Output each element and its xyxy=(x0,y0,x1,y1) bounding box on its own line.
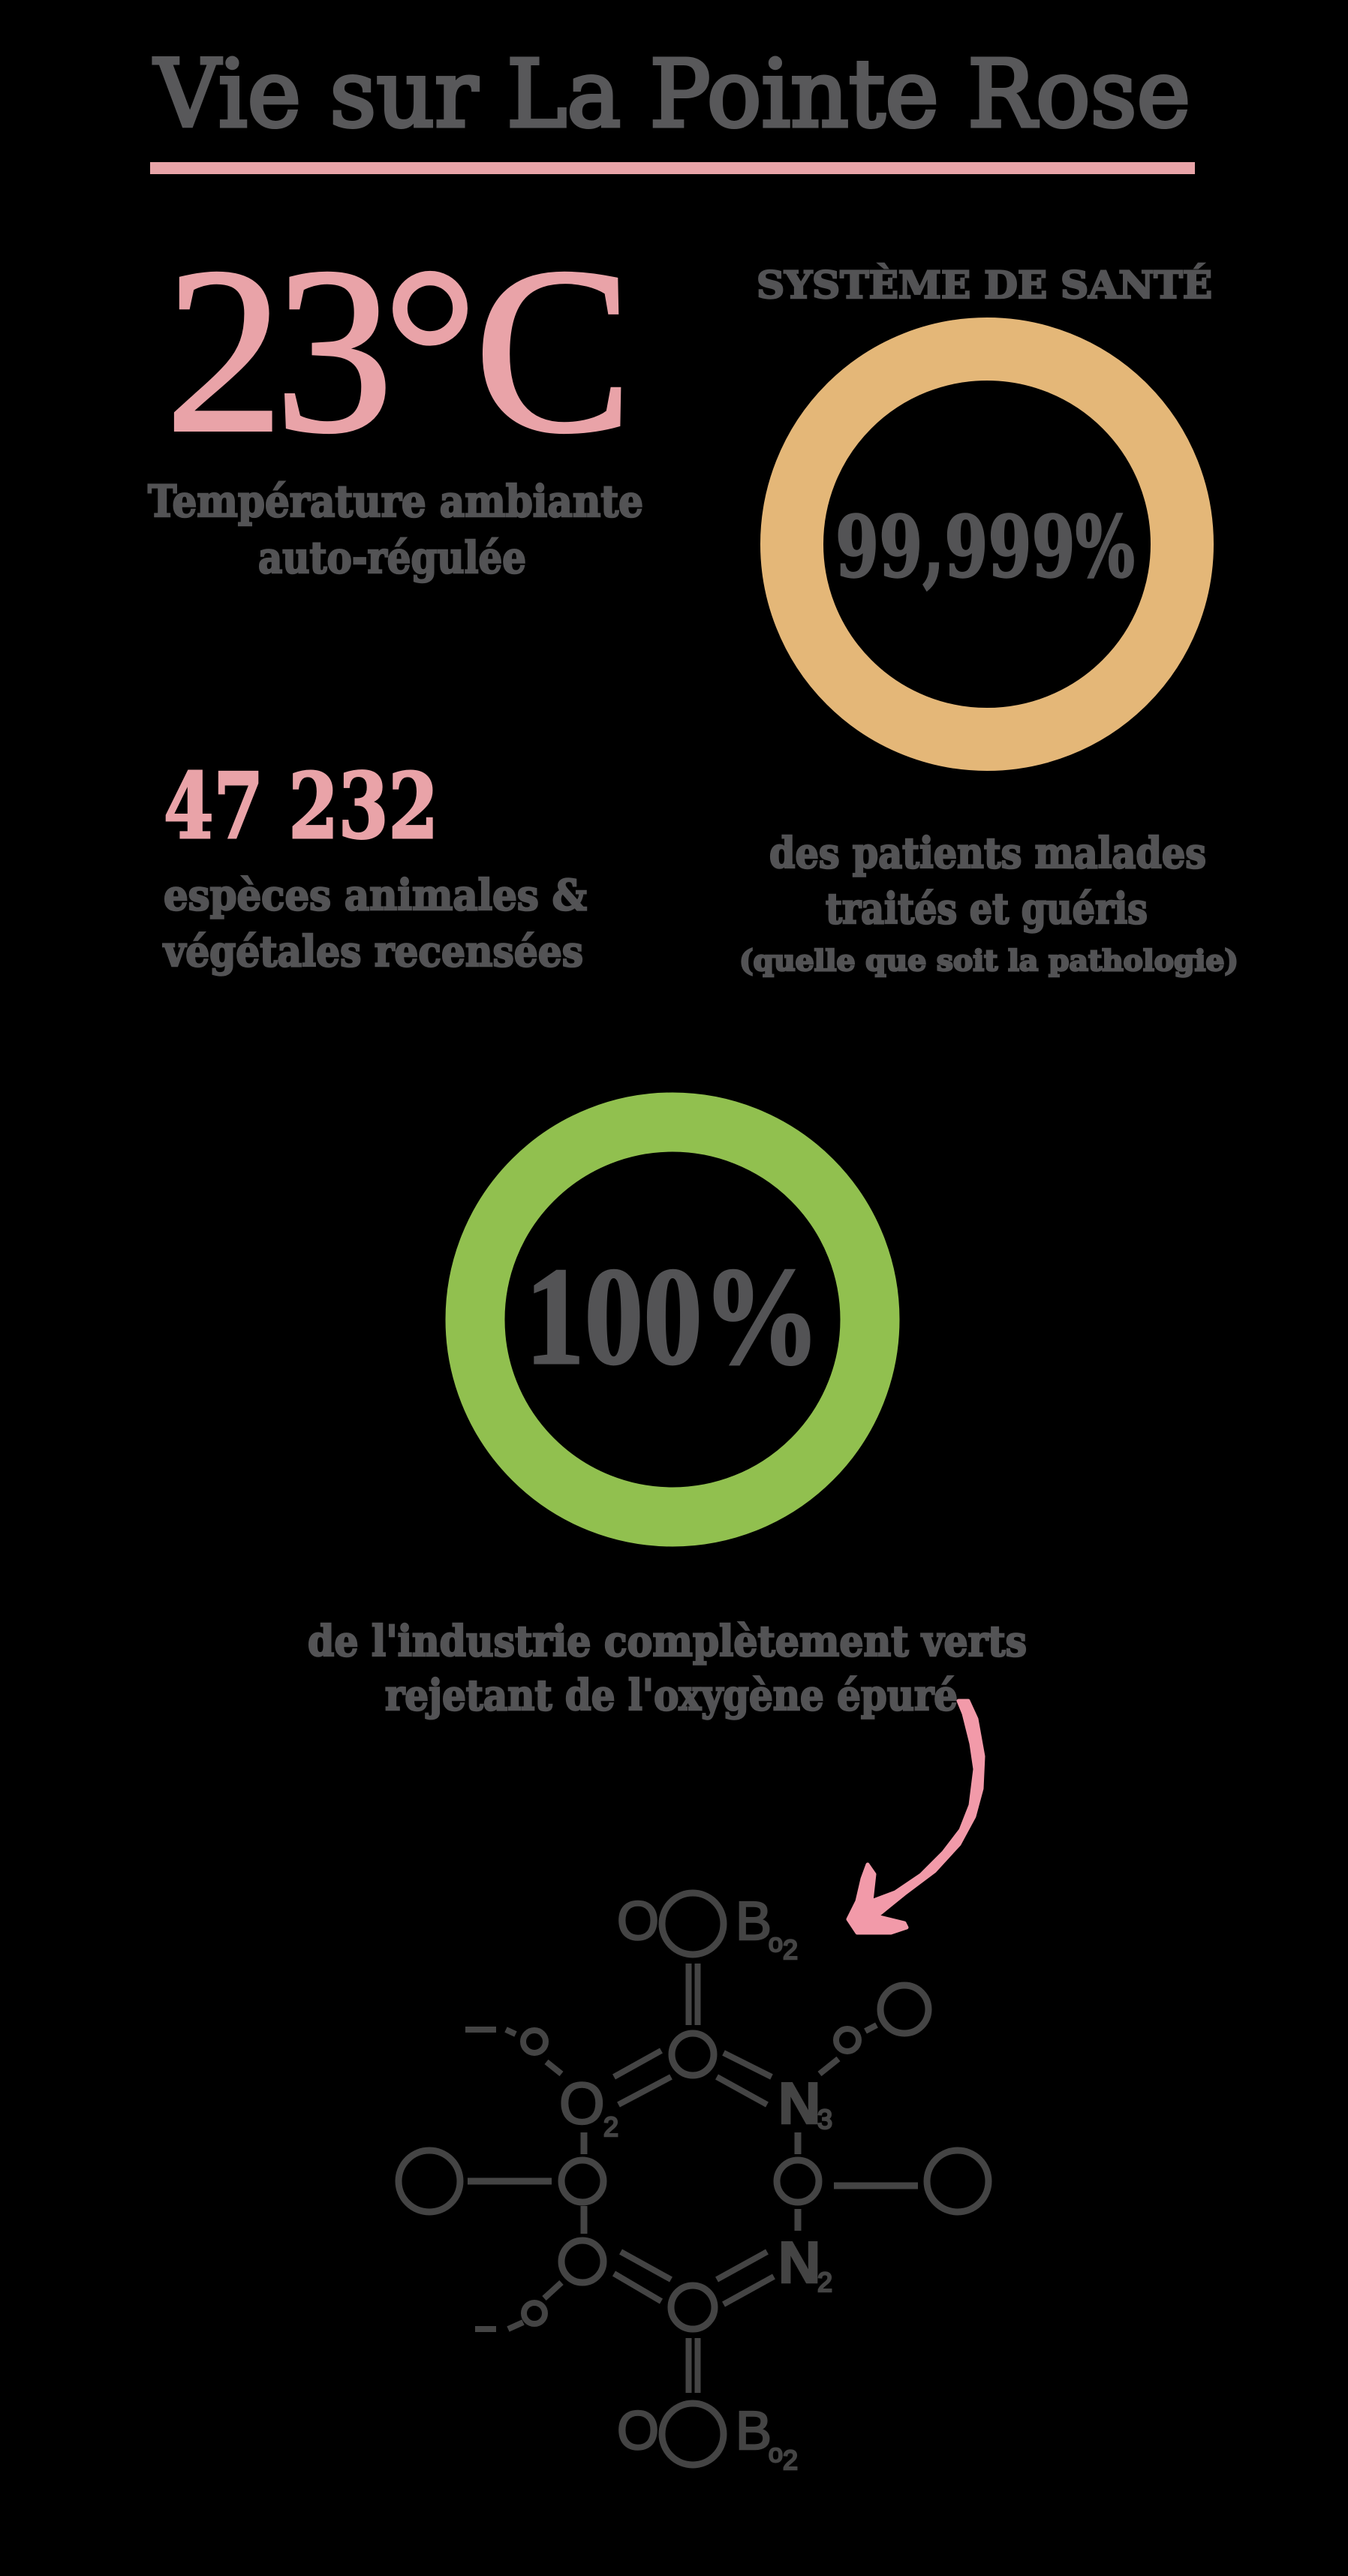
arrow: curved pink arrow xyxy=(848,1701,983,1933)
green ring xyxy=(475,1122,870,1517)
health footnote: (quelle que soit la pathologie) xyxy=(739,943,1238,977)
ring atoms and bonds: 2 xyxy=(817,2267,832,2298)
ring atoms and bonds: O xyxy=(559,2070,605,2136)
bottom group: O xyxy=(617,2401,659,2461)
ring atoms and bonds: N xyxy=(778,2070,820,2136)
species number: 47 232 xyxy=(164,754,438,859)
big number: 23°C: 23°C xyxy=(165,219,633,482)
top group xyxy=(617,1891,798,2025)
ring atoms and bonds: 2 xyxy=(603,2111,618,2142)
bottom group: B xyxy=(736,2401,772,2461)
orange ring xyxy=(792,349,1182,739)
side branches xyxy=(399,1985,988,2329)
top group: o xyxy=(769,1929,783,1958)
title: Vie sur La Pointe Rose xyxy=(153,41,1190,149)
species caption: espèces animales & xyxy=(164,871,587,920)
title underline xyxy=(150,162,1195,174)
panel: species xyxy=(162,754,587,977)
panel: green industry xyxy=(308,1122,1027,1720)
industry caption line 2: rejetant de l'oxygène épuré xyxy=(385,1671,958,1720)
temperature caption line 2: auto-régulée xyxy=(258,532,526,583)
temperature caption: Température ambiante xyxy=(148,476,643,527)
health heading: SYSTÈME DE SANTÉ xyxy=(757,263,1212,307)
panel: health system xyxy=(739,263,1238,977)
bottom group: 2 xyxy=(783,2445,798,2475)
health caption line 2: traités et guéris xyxy=(826,884,1148,934)
industry caption: de l'industrie complètement verts xyxy=(308,1617,1027,1666)
top group: O xyxy=(617,1891,659,1952)
molecule diagram xyxy=(399,1891,988,2475)
health percentage: 99,999% xyxy=(835,498,1135,597)
industry percentage: 100% xyxy=(525,1239,820,1394)
bottom group: o xyxy=(769,2439,783,2468)
panel: temperature xyxy=(148,219,643,583)
ring atoms and bonds: N xyxy=(778,2229,820,2295)
health caption: des patients malades xyxy=(769,829,1206,878)
top group: B xyxy=(736,1891,772,1952)
species caption line 2: végétales recensées xyxy=(162,927,583,977)
ring atoms and bonds xyxy=(559,2033,832,2329)
top group: 2 xyxy=(783,1934,798,1965)
bottom group xyxy=(617,2338,798,2475)
ring atoms and bonds: 3 xyxy=(817,2104,832,2135)
